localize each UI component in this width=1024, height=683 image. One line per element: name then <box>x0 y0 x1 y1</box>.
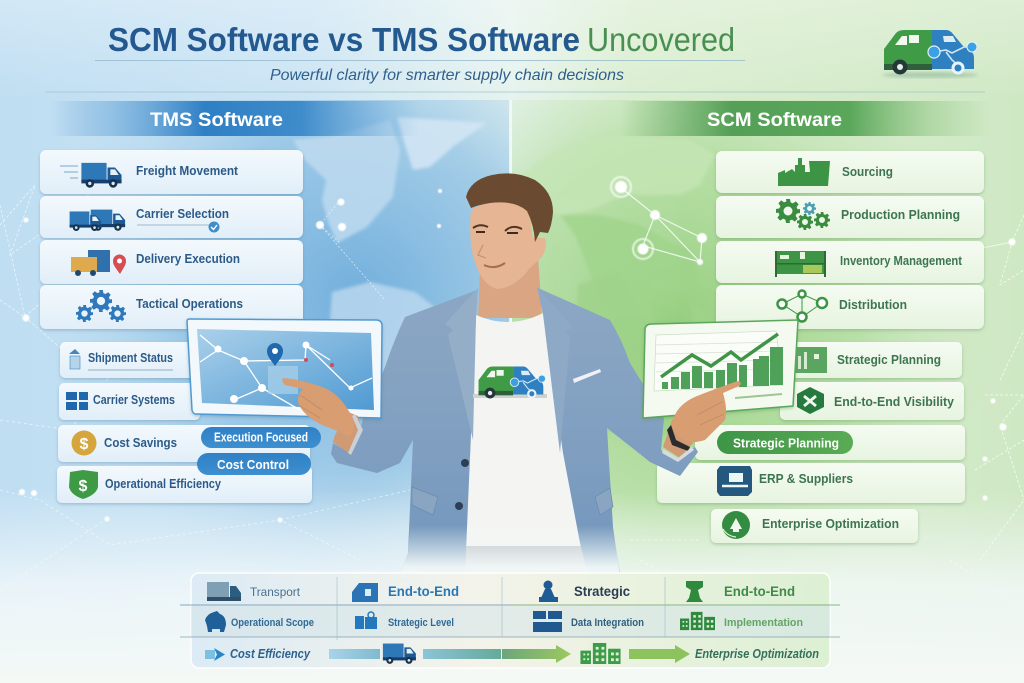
card: Tactical Operations <box>40 285 303 329</box>
card: Sourcing: Sourcing <box>842 165 893 179</box>
right hand, watch and cuff <box>662 381 741 462</box>
row 1: Strategic <box>539 580 630 602</box>
TMS banner: TMS Software <box>150 109 283 131</box>
card: End-to-End Visibility <box>780 382 964 420</box>
header divider <box>45 91 985 93</box>
card: Distribution <box>716 285 984 329</box>
row 1: Transport <box>207 582 301 601</box>
row 2: Operational Scope <box>205 611 314 632</box>
shirt logo <box>473 366 547 398</box>
left hand and cuff <box>282 378 363 455</box>
logo: van network <box>882 30 978 78</box>
person <box>331 173 698 575</box>
title: SCM Software vs TMS Software <box>108 21 580 58</box>
network lines and nodes: left <box>0 175 410 590</box>
row 1: Transport: Transport <box>250 585 301 599</box>
card: Cost Savings: $ <box>80 436 89 453</box>
right lapel <box>537 287 573 453</box>
card: Freight Movement <box>40 150 303 194</box>
card: Carrier Selection: Carrier Selection <box>136 207 229 221</box>
card: Carrier Selection <box>40 196 303 238</box>
row 2: Strategic Level <box>355 612 454 629</box>
card: End-to-End Visibility: End-to-End Visibility <box>834 395 954 409</box>
card: Delivery Execution <box>40 240 303 284</box>
head <box>466 173 553 289</box>
pill: Cost Control <box>197 453 311 475</box>
pill: Execution Focused: Execution Focused <box>214 430 308 444</box>
card: Inventory Management: Inventory Management <box>840 254 963 268</box>
world map: green side <box>520 135 715 440</box>
card: Operational Efficiency <box>57 466 312 503</box>
row 1: End-to-End green: End-to-End <box>724 583 795 599</box>
row 3: Cost Efficiency <box>205 646 311 661</box>
row 2: Data Integration: Data Integration <box>571 617 644 629</box>
card: Enterprise Optimization <box>711 509 918 543</box>
card: Operational Efficiency: Operational Efficiency <box>105 477 221 491</box>
title underline <box>95 60 745 62</box>
card: Enterprise Optimization: Enterprise Optimization <box>762 517 899 531</box>
left tablet: route map <box>187 319 382 418</box>
panel: TMS features <box>40 150 312 503</box>
card: Carrier Systems <box>59 383 200 420</box>
card: Cost Savings <box>58 425 310 462</box>
row 2: Operational Scope: Operational Scope <box>231 617 314 629</box>
card: Production Planning <box>716 196 984 238</box>
right pocket <box>595 488 613 515</box>
t-shirt <box>462 313 582 550</box>
row 3: flow arrow band <box>329 643 690 664</box>
card: Cost Savings: Cost Savings <box>104 436 177 450</box>
SCM banner <box>620 101 990 136</box>
card: Inventory Management <box>716 241 984 283</box>
subtitle: Powerful clarity for smarter supply chain decisions <box>270 67 624 84</box>
network nodes: right <box>611 177 1016 500</box>
right tablet: growth chart <box>643 320 798 418</box>
pill: Strategic Planning <box>717 431 853 454</box>
comparison table <box>180 573 840 668</box>
row 1: End-to-End green <box>686 581 795 602</box>
card: Strategic Planning <box>780 342 962 378</box>
card: Strategic Planning: Strategic Planning <box>837 353 941 367</box>
trousers and belt <box>460 546 588 575</box>
card: Distribution: Distribution <box>839 298 907 312</box>
row 2: Strategic Level: Strategic Level <box>388 617 454 629</box>
network lines: right <box>620 187 1024 610</box>
row 2: Data Integration <box>533 611 644 632</box>
card: Shipment Status: Shipment Status <box>88 351 173 365</box>
pill: Strategic Planning: Strategic Planning <box>733 436 839 450</box>
bottom fade <box>0 490 1024 683</box>
card: Sourcing <box>716 151 984 193</box>
left lapel <box>445 288 478 440</box>
buttons <box>455 459 469 510</box>
row 2: Implementation: Implementation <box>724 617 803 629</box>
card: Carrier Systems: Carrier Systems <box>93 393 175 407</box>
TMS banner <box>50 101 420 136</box>
card: Strategic Planning pill row <box>695 425 965 460</box>
jacket body <box>331 287 698 575</box>
world map: blue side <box>293 117 487 420</box>
row 1: Strategic: Strategic <box>574 583 630 599</box>
neck <box>478 255 542 318</box>
bottom fade over person <box>399 525 620 577</box>
card: Tactical Operations: Tactical Operations <box>136 297 243 311</box>
title: Uncovered <box>587 21 735 58</box>
card: Delivery Execution: Delivery Execution <box>136 252 240 266</box>
row 3: Enterprise Optimization: Enterprise Optimization <box>695 646 819 661</box>
card: Operational Efficiency: $ <box>79 478 88 495</box>
card: Freight Movement: Freight Movement <box>136 164 239 178</box>
row 3: Cost Efficiency: Cost Efficiency <box>230 646 311 661</box>
network nodes: left <box>19 189 442 522</box>
card: Production Planning: Production Planning <box>841 208 960 222</box>
row 1: End-to-End <box>352 583 459 602</box>
pill: Execution Focused <box>201 427 321 448</box>
card: ERP & Suppliers <box>657 463 965 503</box>
pill: Cost Control: Cost Control <box>217 458 289 472</box>
row 2: Implementation <box>680 612 803 630</box>
left pocket <box>412 487 438 515</box>
card: ERP & Suppliers: ERP & Suppliers <box>759 472 853 486</box>
row 1: End-to-End: End-to-End <box>388 583 459 599</box>
pocket square <box>573 369 601 383</box>
card: Shipment Status <box>60 342 200 378</box>
SCM banner: SCM Software <box>707 109 842 131</box>
panel: SCM features <box>657 151 984 543</box>
